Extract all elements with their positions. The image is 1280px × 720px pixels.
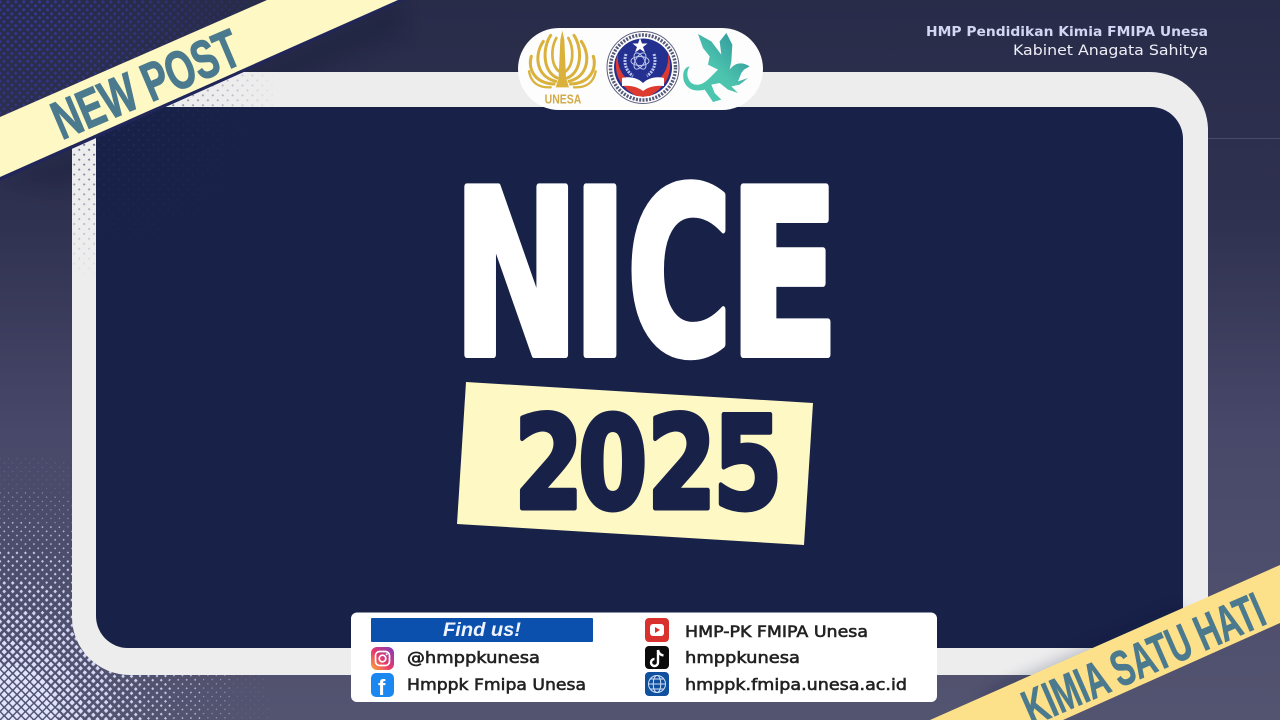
logo: UNESA bbox=[529, 31, 596, 106]
shadow: bottom ribbon on frame bbox=[980, 612, 1190, 706]
logo: UNESA: UNESA bbox=[545, 92, 581, 106]
halftone: top-left blue dots bbox=[0, 0, 255, 116]
tiktok row: hmppkunesa bbox=[685, 648, 800, 667]
title: NICE bbox=[453, 142, 840, 410]
ribbon: kimia satu hati bbox=[930, 565, 1280, 720]
facebook row: Hmppk Fmipa Unesa bbox=[407, 675, 586, 694]
logo pill bbox=[518, 28, 763, 110]
year text bbox=[514, 390, 782, 539]
title: NICE: N bbox=[453, 142, 580, 410]
logo: griffin mascot bbox=[683, 33, 750, 102]
social media card bbox=[351, 612, 937, 702]
youtube row bbox=[645, 618, 868, 642]
ribbon: new post bbox=[0, 0, 405, 181]
youtube row: HMP-PK FMIPA Unesa bbox=[685, 622, 868, 641]
title: NICE: I bbox=[572, 142, 628, 410]
shadow: top ribbon on background bbox=[0, 0, 405, 190]
website row: hmppk.fmipa.unesa.ac.id bbox=[685, 675, 907, 694]
halftone: bottom-left white dots bbox=[0, 455, 268, 720]
instagram row: @hmppkunesa bbox=[407, 648, 540, 667]
website row bbox=[645, 672, 907, 696]
instagram row bbox=[371, 647, 540, 670]
header text: organisation name bbox=[926, 24, 1208, 59]
find us banner: Find us! bbox=[443, 620, 521, 641]
year tag: 2025 bbox=[457, 382, 813, 545]
facebook row: f bbox=[378, 675, 386, 700]
white frame with navy panel bbox=[72, 72, 1208, 675]
logo: HMP emblem bbox=[607, 32, 679, 104]
year text: 5 bbox=[713, 390, 782, 539]
tiktok row bbox=[645, 646, 800, 669]
year text: 2 bbox=[514, 390, 584, 539]
header text: organisation name: HMP Pendidikan Kimia FMIPA Unesa bbox=[926, 24, 1208, 40]
find us banner bbox=[371, 618, 593, 642]
title: NICE: E bbox=[728, 142, 840, 410]
header text: organisation name: Kabinet Anagata Sahitya bbox=[1013, 43, 1208, 59]
facebook row bbox=[371, 673, 586, 700]
title: NICE: C bbox=[626, 142, 732, 408]
year text: 0 bbox=[578, 390, 648, 539]
year text: 2 bbox=[647, 390, 716, 539]
